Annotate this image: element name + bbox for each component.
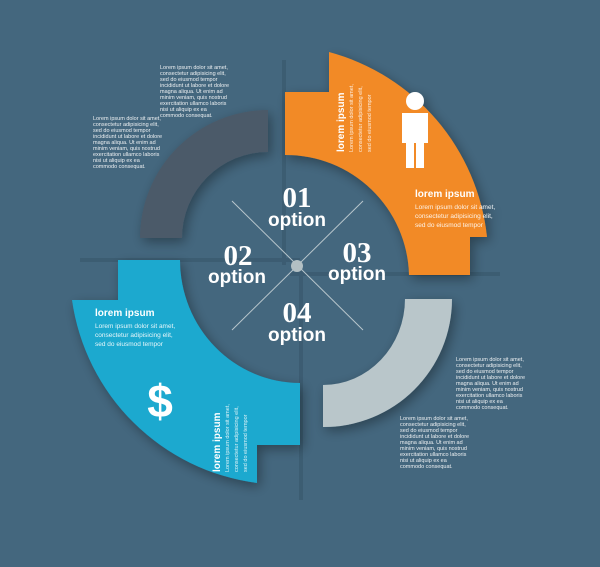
options labels: 03 <box>342 237 372 269</box>
blue vertical text: sed do eiusmod tempor <box>243 414 249 472</box>
text block: right: nisi ut aliquip ex ea <box>456 399 504 405</box>
center dot <box>291 260 303 272</box>
blue vertical text: consectetur adipisicing elit, <box>234 406 240 472</box>
center cross lines <box>232 201 363 330</box>
options labels: option <box>268 325 326 346</box>
text block: left: magna aliqua. Ut enim ad <box>93 140 156 146</box>
text block: left: exercitation ullamco laboris <box>93 152 160 158</box>
text block: bottom: Lorem ipsum dolor sit amet, <box>400 416 468 422</box>
blue heading text: Lorem ipsum dolor sit amet, <box>95 323 175 330</box>
text block: bottom <box>400 416 469 470</box>
text block: bottom: minim veniam, quis nostrud <box>400 446 467 452</box>
text block: bottom: commodo consequat. <box>400 464 453 470</box>
panel: orange <box>285 52 495 275</box>
text block: right <box>456 357 525 411</box>
orange heading text: sed do eiusmod tempor <box>415 222 484 229</box>
orange vertical text: Lorem ipsum dolor sit amet, <box>349 84 355 152</box>
text block: right: Lorem ipsum dolor sit amet, <box>456 357 524 363</box>
orange vertical text: sed do eiusmod tempor <box>367 94 373 152</box>
text block: right: sed do eiusmod tempor <box>456 369 514 375</box>
text block: top: commodo consequat. <box>160 113 213 119</box>
panel: blue <box>72 260 300 483</box>
text block: left: Lorem ipsum dolor sit amet, <box>93 116 161 122</box>
text block: top: incididunt ut labore et dolore <box>160 83 229 89</box>
options labels: option <box>328 264 386 285</box>
text block: bottom: consectetur adipisicing elit, <box>400 422 466 428</box>
text block: bottom: magna aliqua. Ut enim ad <box>400 440 463 446</box>
orange vertical text: lorem ipsum <box>336 92 347 152</box>
orange heading text <box>415 189 495 229</box>
text block: top: magna aliqua. Ut enim ad <box>160 89 223 95</box>
orange vertical text <box>336 84 373 152</box>
text block: top: Lorem ipsum dolor sit amet, <box>160 65 228 71</box>
text block: left <box>93 116 162 170</box>
icon: dollar: $ <box>147 375 173 427</box>
text block: top: nisi ut aliquip ex ea <box>160 107 208 113</box>
text block: top: consectetur adipisicing elit, <box>160 71 226 77</box>
text block: right: incididunt ut labore et dolore <box>456 375 525 381</box>
text block: bottom: incididunt ut labore et dolore <box>400 434 469 440</box>
text block: bottom: sed do eiusmod tempor <box>400 428 458 434</box>
options labels: 01 <box>282 182 312 214</box>
text block: right: commodo consequat. <box>456 405 509 411</box>
blue vertical text: lorem ipsum <box>212 412 223 472</box>
text block: top: sed do eiusmod tempor <box>160 77 218 83</box>
text block: left: minim veniam, quis nostrud <box>93 146 160 152</box>
blue heading text <box>95 308 175 348</box>
orange vertical text: consectetur adipisicing elit, <box>358 86 364 152</box>
orange heading text: consectetur adipisicing elit, <box>415 213 493 220</box>
text block: right: minim veniam, quis nostrud <box>456 387 523 393</box>
blue heading text: consectetur adipisicing elit, <box>95 332 173 339</box>
blue vertical text <box>212 404 249 472</box>
text block: left: consectetur adipisicing elit, <box>93 122 159 128</box>
text block: top: exercitation ullamco laboris <box>160 101 227 107</box>
options labels: 04 <box>282 297 312 329</box>
options labels <box>208 182 386 346</box>
blue vertical text: Lorem ipsum dolor sit amet, <box>225 404 231 472</box>
text block: right: magna aliqua. Ut enim ad <box>456 381 519 387</box>
text block: left: sed do eiusmod tempor <box>93 128 151 134</box>
panel: dark gray arc <box>140 110 268 238</box>
text block: bottom: exercitation ullamco laboris <box>400 452 467 458</box>
text block: top <box>160 65 229 119</box>
blue heading text: lorem ipsum <box>95 308 155 319</box>
text block: right: consectetur adipisicing elit, <box>456 363 522 369</box>
text block: top: minim veniam, quis nostrud <box>160 95 227 101</box>
text block: left: nisi ut aliquip ex ea <box>93 158 141 164</box>
text block: bottom: nisi ut aliquip ex ea <box>400 458 448 464</box>
options labels: option <box>268 210 326 231</box>
text block: left: incididunt ut labore et dolore <box>93 134 162 140</box>
orange heading text: lorem ipsum <box>415 189 475 200</box>
icon: person <box>402 92 428 168</box>
text block: right: exercitation ullamco laboris <box>456 393 523 399</box>
text block: left: commodo consequat. <box>93 164 146 170</box>
blue heading text: sed do eiusmod tempor <box>95 341 164 348</box>
options labels: 02 <box>224 240 252 272</box>
panel: light gray arc <box>323 299 452 427</box>
seam shadows <box>80 60 500 500</box>
options labels: option <box>208 267 266 288</box>
orange heading text: Lorem ipsum dolor sit amet, <box>415 204 495 211</box>
